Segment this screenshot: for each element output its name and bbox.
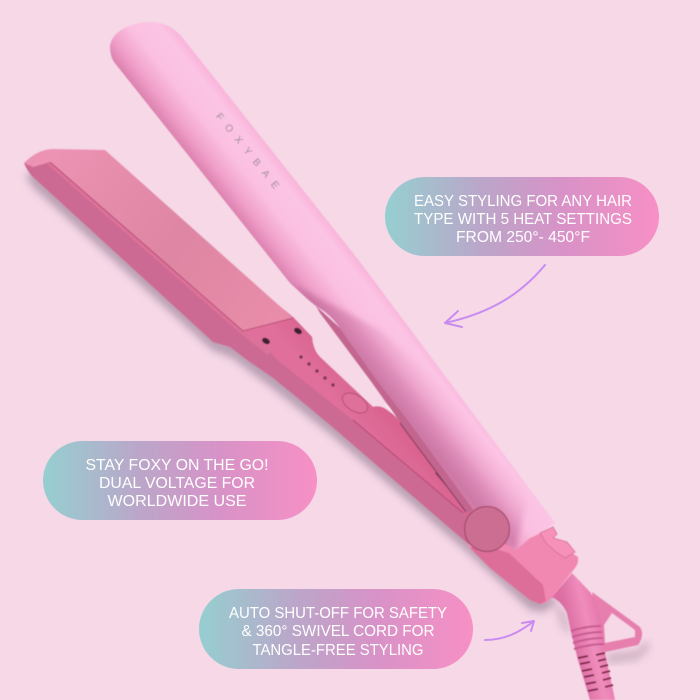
upper arm underside	[316, 306, 474, 512]
callout text: FROM 250°- 450°F	[456, 229, 590, 246]
barrel tabs	[540, 527, 575, 558]
hinge disc	[464, 506, 510, 552]
callout text: AUTO SHUT-OFF FOR SAFETY	[229, 605, 447, 622]
callout text: TANGLE-FREE STYLING	[252, 642, 424, 659]
plate edge line	[50, 162, 293, 331]
callout text: TYPE WITH 5 HEAT SETTINGS	[414, 211, 632, 228]
inner channel	[243, 317, 472, 518]
strain relief	[552, 573, 615, 700]
heat setting dots	[299, 355, 335, 387]
ceramic plate	[24, 149, 293, 331]
lower groove	[353, 420, 463, 513]
upper arm shell	[110, 22, 555, 551]
brand name: FOXYBAE	[213, 111, 281, 192]
lower arm with ceramic plate	[24, 149, 560, 604]
pill background	[199, 589, 473, 669]
rim highlight	[50, 162, 270, 352]
power cord	[552, 573, 615, 700]
callout: heat settings	[385, 177, 659, 256]
cord dashes	[578, 653, 613, 691]
background gap sliver	[384, 404, 403, 424]
upper arm	[110, 22, 555, 551]
callout text: DUAL VOLTAGE FOR	[99, 475, 255, 492]
barrel body	[468, 520, 578, 604]
lower shading	[292, 284, 535, 551]
callout: auto shut-off	[199, 589, 473, 669]
hinge slot	[435, 471, 470, 510]
pill background	[385, 177, 659, 256]
callout text: & 360° SWIVEL CORD FOR	[242, 623, 434, 640]
barrel lower face	[470, 545, 546, 604]
callout text: WORLDWIDE USE	[108, 493, 246, 510]
vent holes	[261, 326, 303, 346]
callout text	[86, 457, 268, 510]
arrow: to swivel cord	[485, 621, 534, 640]
swivel barrel	[468, 520, 578, 604]
lower arm body	[24, 160, 560, 604]
cord ribs	[571, 626, 604, 649]
callout text: STAY FOXY ON THE GO!	[86, 457, 268, 474]
callout text: EASY STYLING FOR ANY HAIR	[414, 193, 632, 210]
callout text	[229, 605, 447, 659]
callout text	[414, 193, 632, 246]
pill background	[43, 441, 317, 520]
cast shadow	[26, 165, 558, 612]
power button	[339, 389, 371, 417]
hanging loop	[592, 592, 642, 652]
arrow: to upper arm	[445, 265, 545, 327]
callout: dual voltage	[43, 441, 317, 520]
